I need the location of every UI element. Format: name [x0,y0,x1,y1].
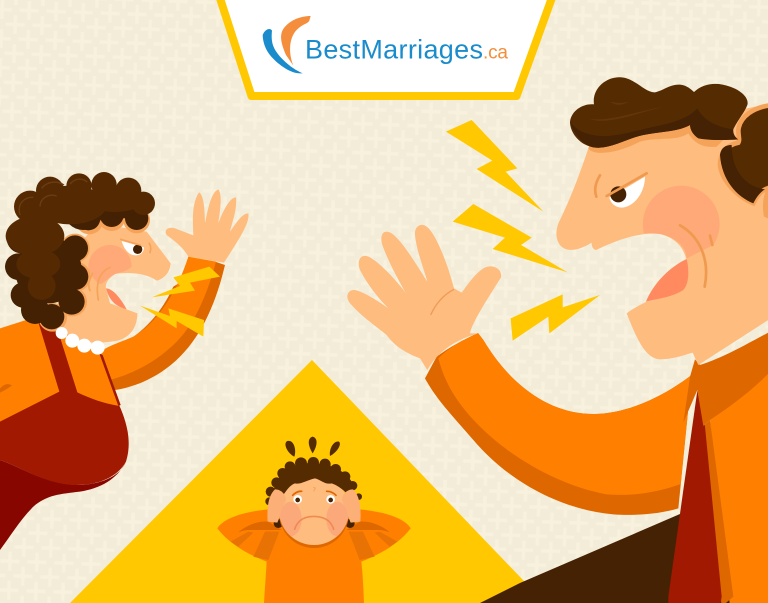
sleeve shadow [425,333,692,515]
logo wordmark: BestMarriages [305,34,483,64]
child head [274,475,355,548]
woman figure [0,172,248,550]
yellow triangle behind child [70,360,545,603]
banner panel [218,0,554,96]
shirt front [710,368,768,603]
palm crease [431,289,454,315]
woman curly hair [5,188,148,329]
cheek [643,186,720,258]
pearl necklace [56,327,105,355]
sleeve [438,333,692,495]
man ear [763,187,768,218]
man head and hand [347,77,768,370]
logo swoosh mark [263,16,311,73]
man eye [607,173,647,208]
woman lower dress [0,313,129,550]
man back hair [720,105,768,203]
child hands on ears [267,489,361,523]
hairline shadow [588,110,730,153]
shirt collar [683,330,768,426]
man arm and torso [425,330,768,603]
logo banner [218,0,554,96]
child figure [217,437,411,603]
necktie [668,391,722,603]
child curly hair [265,457,362,505]
shirt placket [703,420,733,603]
hair rim shadow [38,204,150,332]
woman hand [166,189,248,263]
child cheeks and mouth [280,502,348,536]
woman arm [98,189,248,390]
child torso and arms [217,509,411,603]
man face [556,103,768,365]
man front hair [570,77,748,148]
woman torso [0,317,121,422]
woman head [5,172,220,355]
logo domain suffix: .ca [483,42,508,64]
mouth creases [595,175,712,287]
man hand [347,225,501,370]
dark brown table [480,480,768,603]
sweat drops [285,437,340,457]
man lightning bolts [446,120,600,341]
tongue [646,259,688,302]
woman lightning bolts [140,267,220,337]
